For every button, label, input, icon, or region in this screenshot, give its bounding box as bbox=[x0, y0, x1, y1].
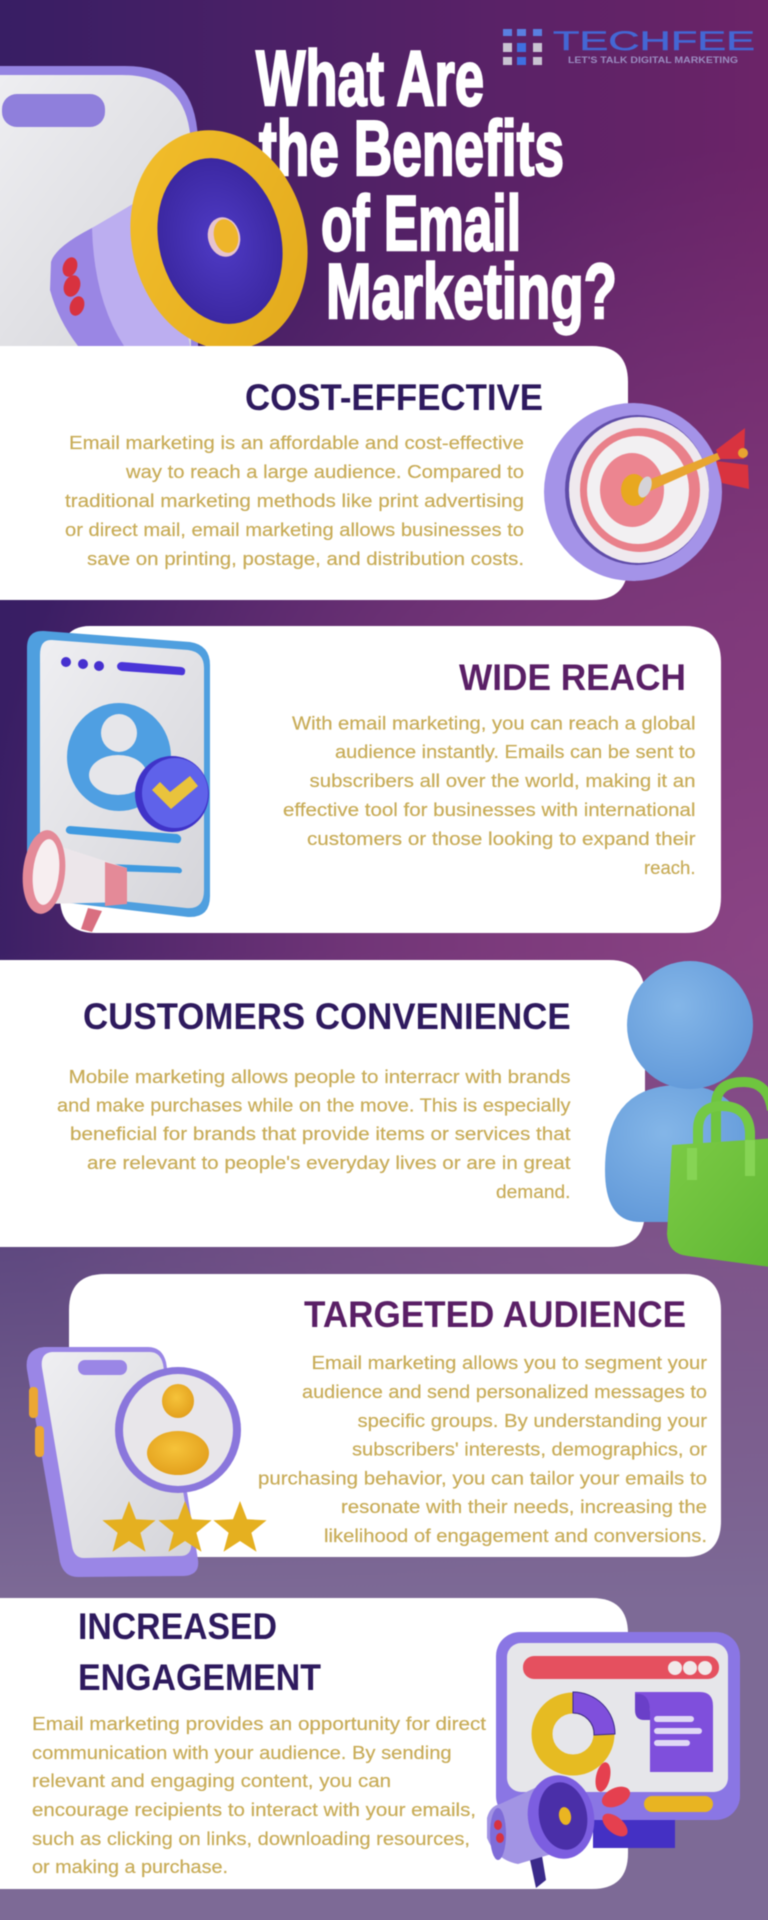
icon: phone with profile and check bbox=[19, 631, 210, 932]
text: customers convenience body: Mobile marketing allows people to interracr with brands bbox=[69, 1066, 571, 1087]
text: targeted audience body: purchasing behavior, you can tailor your emails to bbox=[258, 1468, 707, 1488]
heading: increased engagement: ENGAGEMENT bbox=[78, 1657, 321, 1698]
title: of Email bbox=[321, 179, 521, 267]
text: customers convenience body bbox=[57, 1066, 571, 1202]
text: wide reach body: effective tool for businesses with international bbox=[283, 799, 696, 820]
text: cost-effective body: or direct mail, email marketing allows businesses to bbox=[65, 519, 524, 540]
icon: person with shopping bag bbox=[605, 961, 768, 1268]
text: targeted audience body: specific groups. By understanding your bbox=[358, 1410, 707, 1431]
icon: green bag bbox=[667, 1082, 768, 1268]
text: wide reach body bbox=[283, 713, 696, 878]
text: increased engagement body: Email marketing provides an opportunity for direct bbox=[32, 1713, 486, 1734]
heading: cost-effective: COST-EFFECTIVE bbox=[245, 377, 543, 418]
panel: wide reach bbox=[60, 626, 721, 933]
text: increased engagement body: relevant and engaging content, you can bbox=[32, 1770, 391, 1791]
text: customers convenience body: demand. bbox=[496, 1181, 570, 1202]
icon: three stars bbox=[102, 1501, 267, 1552]
text: increased engagement body: such as clicking on links, downloading resources, bbox=[32, 1828, 470, 1849]
icon: target with arrow bbox=[544, 403, 749, 581]
text: cost-effective body: way to reach a large audience. Compared to bbox=[125, 461, 524, 482]
icon: hero megaphone bbox=[50, 111, 330, 369]
icon: pink megaphone bbox=[19, 828, 127, 932]
text: targeted audience body: audience and send personalized messages to bbox=[302, 1381, 707, 1402]
icon: small megaphone bbox=[487, 1761, 633, 1888]
text: wide reach body: audience instantly. Emails can be sent to bbox=[335, 741, 696, 762]
text: cost-effective body: Email marketing is an affordable and cost-effective bbox=[69, 432, 524, 453]
panel: cost-effective bbox=[0, 346, 628, 600]
text: cost-effective body: save on printing, postage, and distribution costs. bbox=[87, 548, 524, 569]
text: cost-effective body bbox=[65, 432, 524, 569]
heading: customers convenience: CUSTOMERS CONVENIENCE bbox=[83, 996, 571, 1037]
heading: increased engagement: INCREASED bbox=[78, 1606, 277, 1647]
text: customers convenience body: and make purchases while on the move. This is especially bbox=[57, 1094, 571, 1116]
text: increased engagement body bbox=[32, 1713, 486, 1877]
title: the Benefits bbox=[259, 104, 564, 192]
text: targeted audience body: resonate with their needs, increasing the bbox=[341, 1496, 707, 1517]
text: wide reach body: subscribers all over the world, making it an bbox=[310, 770, 696, 791]
text: wide reach body: customers or those looking to expand their bbox=[307, 828, 696, 849]
heading: wide reach: WIDE REACH bbox=[459, 657, 686, 698]
text: increased engagement body: communication with your audience. By sending bbox=[32, 1742, 452, 1763]
logo icon grid bbox=[503, 29, 542, 65]
text: increased engagement body: or making a purchase. bbox=[32, 1856, 228, 1877]
logo tagline: LET'S TALK DIGITAL MARKETING bbox=[568, 55, 738, 65]
panel: increased engagement bbox=[0, 1598, 628, 1889]
icon: phone with user and stars bbox=[27, 1347, 267, 1577]
title: Marketing? bbox=[326, 247, 617, 335]
logo: Techfee bbox=[503, 26, 755, 65]
heading: targeted audience: TARGETED AUDIENCE bbox=[304, 1294, 686, 1335]
text: customers convenience body: beneficial for brands that provide items or services that bbox=[70, 1123, 570, 1144]
text: targeted audience body: subscribers' interests, demographics, or bbox=[352, 1438, 707, 1460]
text: cost-effective body: traditional marketing methods like print advertising bbox=[65, 490, 524, 511]
text: targeted audience body: likelihood of engagement and conversions. bbox=[324, 1525, 707, 1546]
panel: customers convenience bbox=[0, 960, 645, 1247]
chart: donut bbox=[542, 1692, 615, 1765]
panel: targeted audience bbox=[69, 1274, 721, 1557]
icon: browser dashboard with megaphone bbox=[487, 1632, 740, 1888]
title: What Are bbox=[256, 34, 484, 122]
logo wordmark: TECHFEE bbox=[553, 26, 755, 56]
text: increased engagement body: encourage recipients to interact with your emails, bbox=[32, 1799, 476, 1820]
title bbox=[256, 34, 617, 335]
text: wide reach body: With email marketing, you can reach a global bbox=[292, 713, 696, 734]
text: wide reach body: reach. bbox=[644, 857, 696, 878]
icon: document bbox=[635, 1692, 713, 1772]
text: targeted audience body bbox=[258, 1352, 707, 1546]
text: targeted audience body: Email marketing allows you to segment your bbox=[312, 1352, 707, 1373]
icon: hero phone bbox=[0, 66, 198, 346]
text: customers convenience body: are relevant to people's everyday lives or are in great bbox=[87, 1152, 570, 1173]
heading: increased engagement bbox=[78, 1606, 321, 1698]
